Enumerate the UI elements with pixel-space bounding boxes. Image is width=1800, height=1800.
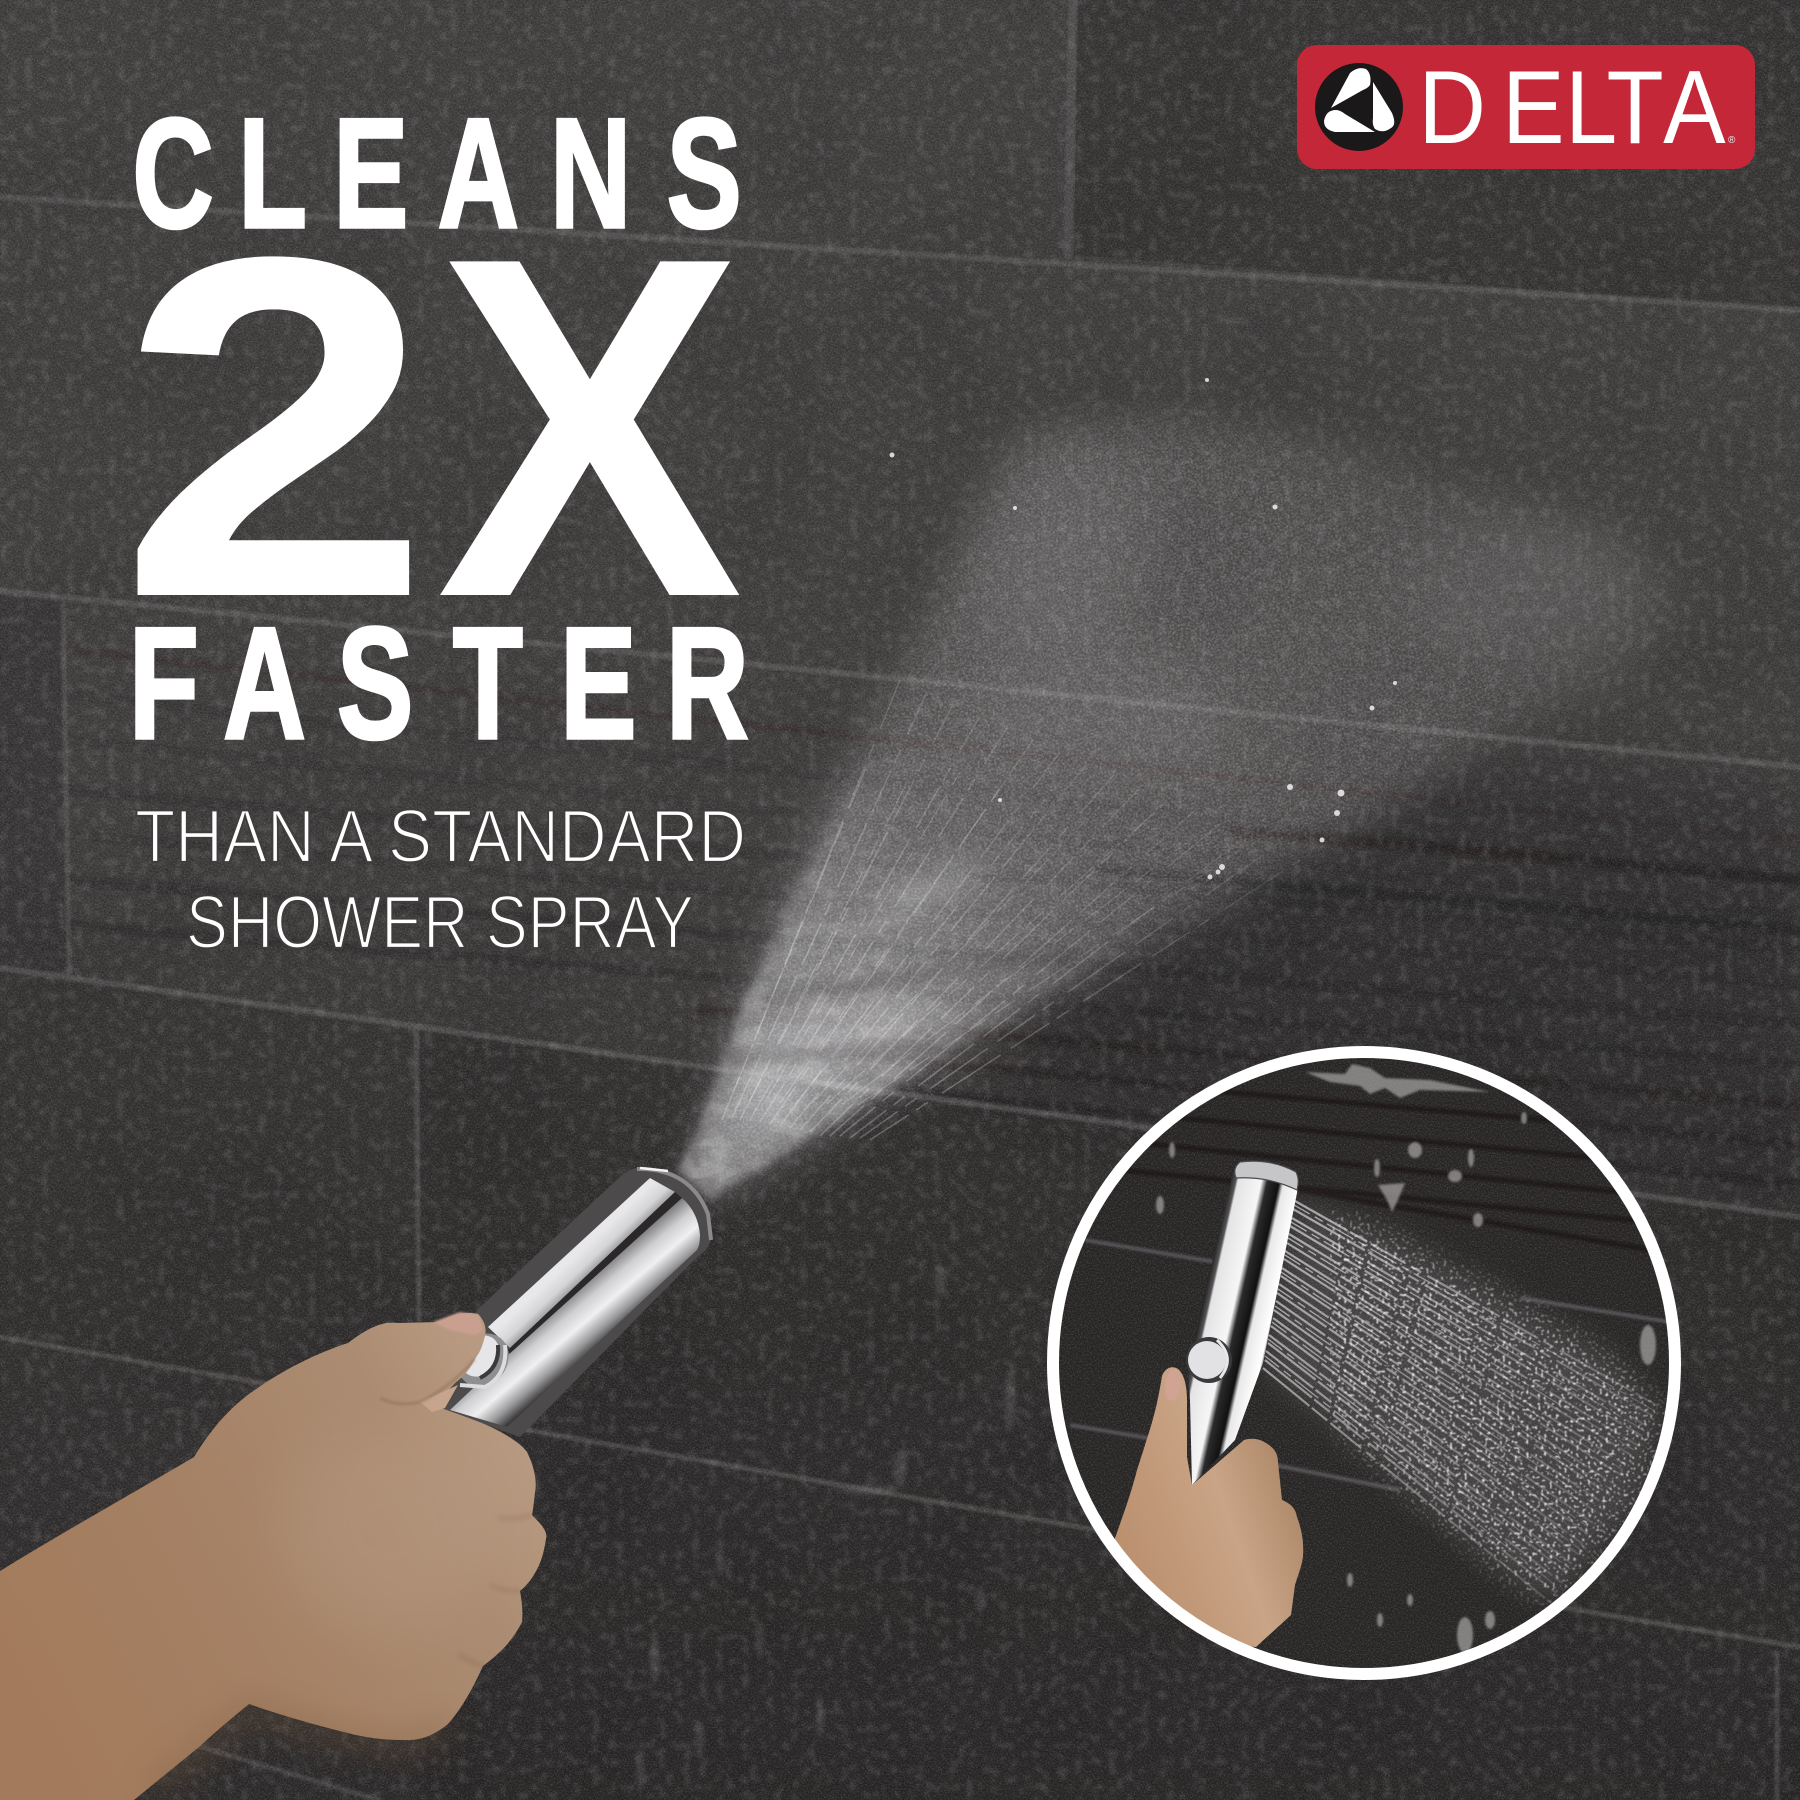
thumb nail [433,1312,483,1335]
dark mass in right-hand striated tile [1000,760,1800,1200]
top rim [1235,1161,1298,1190]
white ring [1053,1052,1675,1674]
striated tile band [70,650,1800,1185]
icon: Delta tri-drop mark [1315,63,1403,151]
sparkling droplets [1330,1210,1670,1610]
button [1186,1337,1232,1383]
white water marks on wall [1156,1064,1656,1653]
mottled water texture [680,854,968,1199]
shower handle in inset [1186,1161,1298,1485]
headline: FASTER: FASTER [129,596,749,772]
finger under thumb [420,1385,458,1412]
hand holding shower [0,1312,546,1800]
headline: 2X: 2 [118,157,432,698]
dark band through the lower spray following the tile [720,950,1080,1060]
subheading: THAN A STANDARD [135,794,746,878]
hand shower handle: chrome tube [443,1167,712,1437]
subheading: SHOWER SPRAY [186,880,694,964]
striated stone lines [1120,1088,1680,1255]
inset background [1050,1050,1680,1680]
bright blotches [734,848,992,1128]
push button [447,1323,519,1397]
bright droplets [890,378,1397,880]
dark reflection line [508,1192,682,1356]
water spray cone from hand shower [660,378,1720,1210]
defined near-nozzle jet [677,740,1300,1198]
end cap rim [637,1169,711,1240]
fingertip nail in inset [1163,1368,1183,1402]
far mist lobes [944,420,1630,780]
headline: 2X [118,157,746,699]
inset circle: close-up of hand shower spray [1050,1050,1680,1680]
wordmark: DELTA [1418,48,1726,165]
lower left darker tile [0,970,419,1405]
spray water lines [1263,1201,1658,1603]
headline: 2X: X [436,157,746,699]
lower edge shading [150,1710,448,1790]
wall joints [1070,1240,1670,1490]
subheading [135,794,746,964]
top right darker tile [1074,0,1800,310]
diffuse mist fan [692,416,1681,1197]
left narrow dark tile [0,595,69,973]
headline: CLEANS: CLEANS [132,86,742,260]
secondary spray lines [1265,1205,1655,1588]
back of hand highlight [280,1430,500,1630]
spray mist fan [1263,1199,1660,1603]
registered mark: ® [1728,135,1736,146]
fine mist speckle [660,400,1720,1210]
main highlight band [450,1198,700,1427]
Delta logo badge [1297,45,1755,169]
lower wall shading [420,1030,1800,1800]
knuckle creases [458,1515,532,1666]
thumb crease shadow [380,1359,475,1404]
hand in inset [1115,1367,1303,1647]
upper highlight band [488,1178,675,1348]
radiating water streaks [722,680,1300,1140]
tube body [443,1167,712,1437]
drips low on wall [636,1264,1016,1792]
